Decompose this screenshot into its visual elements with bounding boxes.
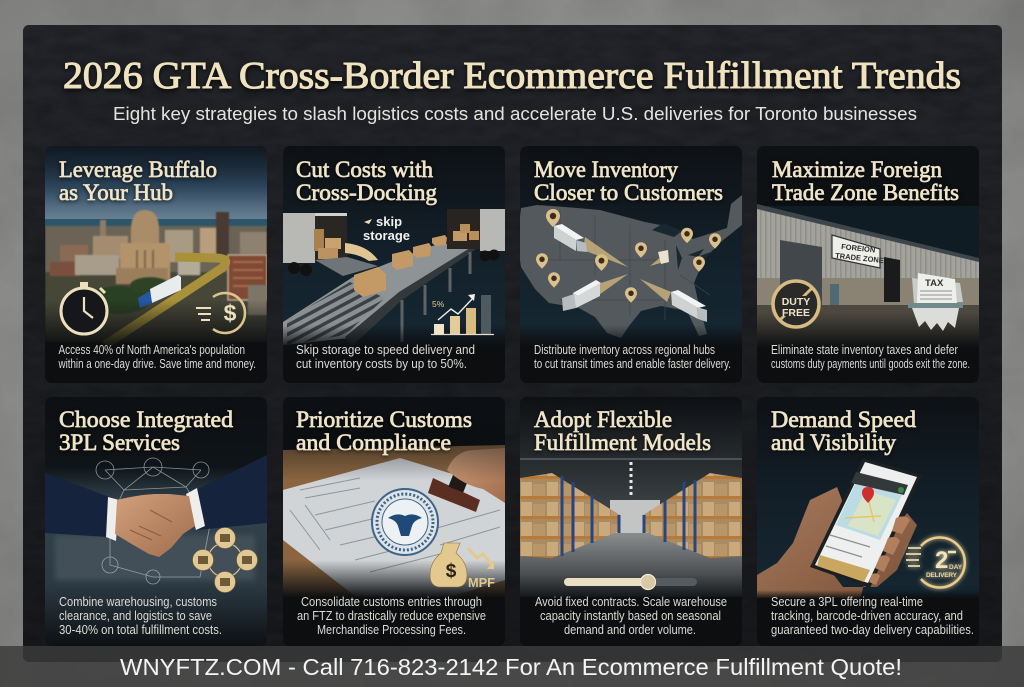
description: tracking, barcode-driven accuracy, and	[771, 609, 963, 623]
icon: duty free badge: DUTY	[782, 296, 810, 308]
icon: money bag with falling arrow	[430, 543, 495, 590]
illustration: Buffalo skyline	[45, 210, 267, 342]
icon: shredded tax form	[908, 273, 963, 331]
panel: Maximize Foreign Trade Zone Benefits	[757, 146, 979, 383]
description: Distribute inventory across regional hubs	[534, 343, 715, 357]
illustration: right racks	[643, 473, 742, 558]
sign: Foreign Trade Zone: TRADE ZONE	[835, 251, 884, 265]
illustration: truck	[138, 275, 181, 308]
heading	[296, 407, 472, 455]
heading	[534, 407, 711, 455]
description: cut inventory costs by up to 50%.	[296, 357, 467, 371]
description: capacity instantly based on seasonal	[540, 609, 721, 623]
map: great lakes	[652, 223, 711, 270]
illustration: customs document	[283, 458, 505, 600]
illustration: left racks	[520, 473, 620, 558]
sign: Foreign Trade Zone	[832, 235, 884, 268]
illustration: right truck	[447, 209, 505, 262]
heading: as Your Hub	[59, 180, 173, 205]
heading	[772, 161, 959, 200]
chart: cost bars: 5%	[432, 299, 445, 309]
description: Eliminate state inventory taxes and defer	[771, 343, 958, 357]
heading: Closer to Customers	[534, 180, 723, 205]
description: Combine warehousing, customs	[59, 595, 217, 609]
label: skip storage: skip	[376, 214, 402, 229]
heading: Demand Speed	[771, 407, 917, 432]
heading	[60, 410, 234, 451]
description: demand and order volume.	[564, 623, 696, 637]
heading: and Visibility	[771, 430, 896, 455]
description	[534, 343, 731, 371]
heading: Adopt Flexible	[534, 407, 672, 432]
icon: 2-day delivery badge: DELIVERY	[926, 572, 958, 579]
heading: and Compliance	[296, 430, 451, 455]
heading	[296, 157, 437, 205]
label: skip storage	[364, 216, 410, 242]
heading: Move Inventory	[534, 157, 678, 182]
icon: money bag with falling arrow: MPF	[468, 576, 495, 590]
description: within a one-day drive. Save time and money.	[58, 357, 256, 371]
icon: 2-day delivery badge: DAY	[949, 564, 963, 571]
footer banner: WNYFTZ.COM - Call 716-823-2142 For An Ecommerce Fulfillment Quote!	[120, 654, 902, 680]
heading: Cross-Docking	[296, 180, 437, 205]
description	[59, 595, 222, 637]
illustration: hand holding phone	[757, 487, 917, 600]
icon: 2-day delivery badge: 2	[935, 547, 948, 574]
heading: Choose Integrated	[59, 407, 234, 432]
heading	[771, 407, 917, 455]
icons: delivery trucks	[554, 224, 707, 322]
heading: Cut Costs with	[296, 157, 433, 182]
icon: dollar speed	[196, 293, 245, 333]
icon: dollar speed: $	[224, 300, 237, 326]
description	[771, 595, 974, 637]
description: guaranteed two-day delivery capabilities.	[771, 623, 974, 637]
heading: Leverage Buffalo	[59, 157, 217, 182]
description: 30-40% on total fulfillment costs.	[59, 623, 222, 637]
description: Secure a 3PL offering real-time	[771, 595, 923, 609]
illustration: stamp and hand	[428, 448, 505, 512]
map: speed trails	[583, 237, 671, 302]
panel: Cut Costs with Cross-Docking	[283, 146, 505, 383]
description	[58, 343, 256, 371]
icon: service cycle	[192, 528, 258, 592]
map: delivery pins	[536, 209, 721, 303]
description: Skip storage to speed delivery and	[296, 343, 475, 357]
illustration: conveyor	[283, 240, 479, 346]
heading	[59, 157, 217, 205]
map: state lines	[540, 210, 710, 320]
subtitle: Eight key strategies to slash logistics costs and accelerate U.S. deliveries for Toronto businesses	[113, 103, 917, 124]
icon: money bag with falling arrow: $	[446, 561, 457, 582]
description: Consolidate customs entries through	[301, 595, 482, 609]
icon: duty free badge	[773, 281, 819, 327]
icon: smartphone map	[810, 458, 922, 588]
description: Avoid fixed contracts. Scale warehouse	[535, 595, 727, 609]
icon: central hub	[658, 250, 669, 264]
sign: Foreign Trade Zone: FOREION	[841, 242, 876, 255]
illustration: left truck	[283, 213, 378, 276]
icon: 2-day delivery badge	[906, 538, 965, 588]
panel: Move Inventory Closer to Customers	[517, 146, 742, 383]
heading: Fulfillment Models	[534, 430, 711, 455]
illustration: network lines	[96, 458, 210, 584]
panel: Adopt Flexible Fulfillment Models	[520, 397, 742, 646]
heading: 3PL Services	[59, 430, 180, 455]
title: 2026 GTA Cross-Border Ecommerce Fulfillment Trends	[63, 55, 961, 97]
illustration: warehouse building	[757, 204, 979, 383]
panel: Demand Speed and Visibility	[757, 397, 979, 646]
illustration: parcels	[354, 235, 447, 297]
footer banner	[0, 646, 1024, 687]
illustration: highway	[105, 257, 226, 345]
icon: capacity slider	[564, 574, 697, 590]
label: skip storage: storage	[363, 228, 410, 243]
illustration: warehouse aisle	[520, 397, 742, 600]
panel: Prioritize Customs and Compliance	[283, 397, 505, 646]
description	[297, 595, 486, 637]
description: Merchandise Processing Fees.	[317, 623, 466, 637]
heading: Prioritize Customs	[296, 407, 472, 432]
panel: Leverage Buffalo as Your Hub	[45, 146, 267, 383]
illustration: customs seal	[372, 489, 438, 555]
icon: duty free badge: FREE	[782, 307, 810, 319]
icon: stopwatch	[61, 282, 107, 334]
icon: shredded tax form: TAX	[925, 278, 944, 289]
map: United States	[517, 195, 742, 338]
illustration: handshake	[45, 455, 267, 557]
fingers over phone	[869, 516, 910, 585]
description	[535, 595, 727, 637]
chart: cost bars	[431, 294, 494, 334]
description: an FTZ to drastically reduce expensive	[297, 609, 486, 623]
description	[771, 343, 970, 371]
description: Access 40% of North America's population	[58, 343, 245, 357]
heading: Trade Zone Benefits	[772, 180, 959, 205]
description: clearance, and logistics to save	[59, 609, 212, 623]
description	[296, 343, 475, 371]
heading	[534, 161, 723, 202]
panel: Choose Integrated 3PL Services	[45, 397, 267, 646]
description: to cut transit times and enable faster delivery.	[534, 357, 731, 371]
illustration: curved arrow	[345, 243, 378, 261]
heading: Maximize Foreign	[772, 157, 942, 182]
